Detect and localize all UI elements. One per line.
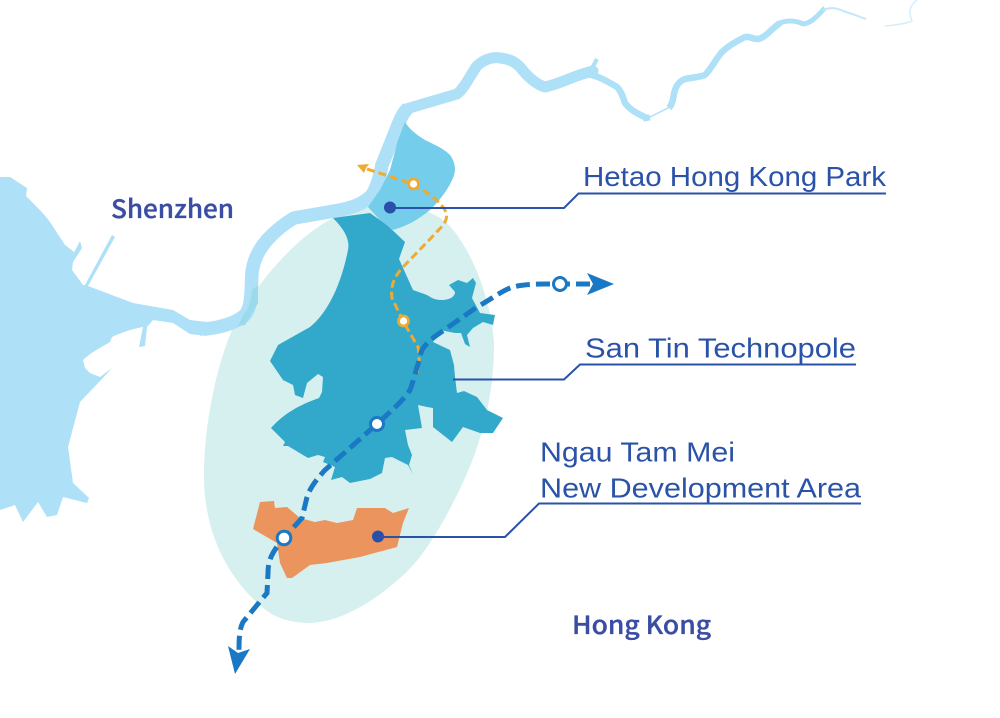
sea: Deep Bay: [0, 177, 207, 522]
callout: Ngau Tam Mei New Development Area: [372, 436, 861, 542]
Ngau Tam Mei New Development Area: [253, 501, 409, 578]
arrow: blue route east: [587, 273, 614, 295]
San Tin Technopole area: [270, 213, 503, 483]
station: blue south: [277, 531, 291, 545]
station: blue east: [554, 278, 566, 290]
arrow: orange route head: [357, 164, 369, 173]
Hetao Hong Kong Park area: [368, 122, 455, 230]
label: Shenzhen: Shenzhen: [111, 190, 234, 226]
river: Shenzhen River: [200, 0, 917, 329]
highlighted zone ellipse: [204, 205, 494, 623]
callout: San Tin Technopole: San Tin Technopole: [585, 332, 856, 364]
orange rail route: [357, 164, 447, 373]
callout: San Tin Technopole: [453, 332, 856, 380]
river overlap on zone: [238, 285, 258, 326]
station: blue middle: [370, 418, 384, 430]
station: orange south: [398, 316, 408, 326]
callout: Ngau Tam Mei New Development Area: New Development Area: [540, 472, 861, 504]
callout: Ngau Tam Mei New Development Area: Ngau Tam Mei: [540, 436, 735, 468]
callout: Hetao Hong Kong Park: Hetao Hong Kong Park: [583, 161, 887, 192]
callout: Hetao Hong Kong Park: [384, 161, 887, 214]
station: orange north: [408, 179, 418, 189]
label: Hong Kong: Hong Kong: [572, 606, 712, 642]
blue rail route: [228, 273, 614, 674]
arrow: blue route south: [228, 646, 250, 674]
